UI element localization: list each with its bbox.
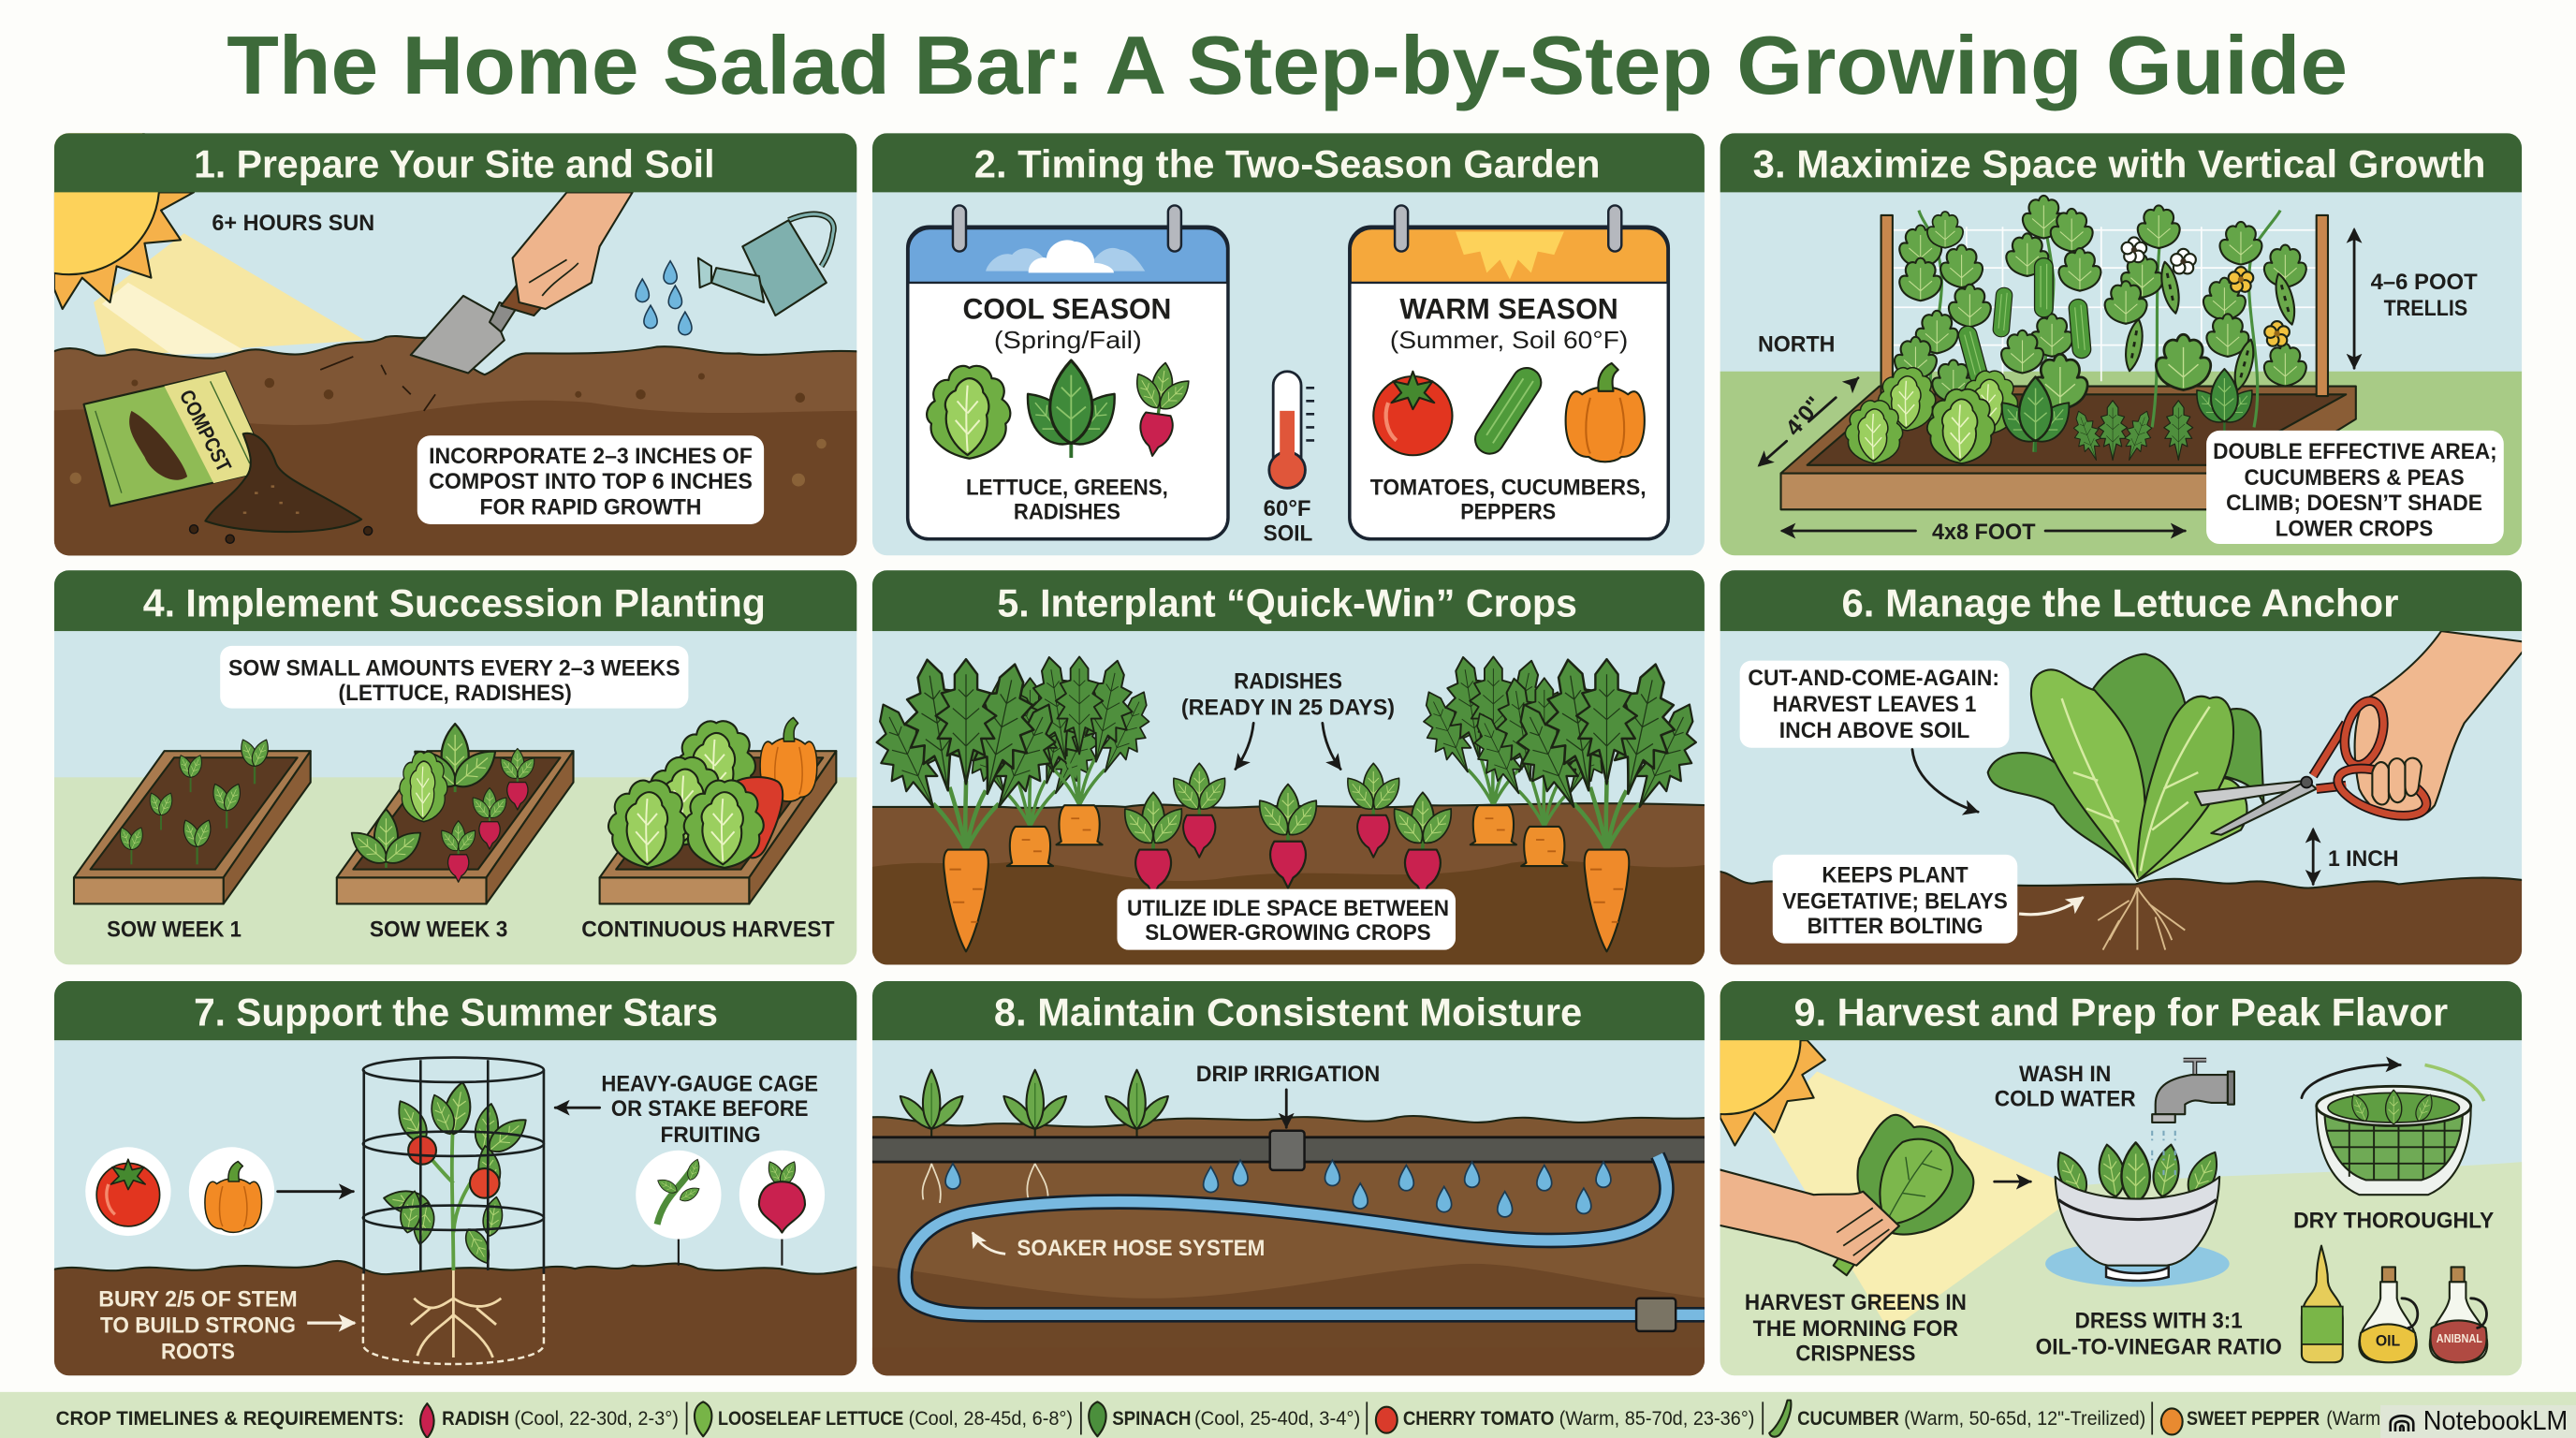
water drops xyxy=(636,261,692,335)
header 3 xyxy=(1720,133,2524,192)
arrow: to hose xyxy=(973,1233,1005,1254)
callout: compost: COMPOST INTO TOP 6 INCHES xyxy=(429,470,753,494)
header 3: 3. Maximize Space with Vertical Growth xyxy=(1753,142,2485,186)
notebooklm wordmark: NotebookLM xyxy=(2423,1406,2568,1436)
spinach details: (Cool, 25-40d, 3-4°) xyxy=(1194,1408,1360,1430)
separator xyxy=(1762,1401,1764,1434)
header 7 xyxy=(54,981,857,1040)
oil bottle xyxy=(2302,1246,2343,1362)
callout: double effective area: DOUBLE EFFECTIVE AREA; xyxy=(2213,440,2497,464)
bed: continuous harvest xyxy=(600,718,836,903)
callout: compost: FOR RAPID GROWTH xyxy=(479,495,701,520)
label: wash xyxy=(1995,1063,2136,1111)
salad spinner xyxy=(2302,1064,2484,1195)
callout: keeps plant vegetative: BITTER BOLTING xyxy=(1808,915,1983,939)
label: drip irrigation: DRIP IRRIGATION xyxy=(1196,1063,1380,1087)
label: continuous harvest: CONTINUOUS HARVEST xyxy=(581,918,835,943)
callout: keeps plant vegetative: KEEPS PLANT xyxy=(1822,864,1969,888)
icon: watering can xyxy=(698,214,834,315)
puddle xyxy=(2045,1240,2230,1287)
label: radishes ready xyxy=(1181,670,1395,721)
notebooklm badge xyxy=(2380,1405,2576,1438)
soil xyxy=(50,1261,862,1381)
label: dressing ratio: OIL-TO-VINEGAR RATIO xyxy=(2036,1335,2282,1359)
callout: cut and come again: CUT-AND-COME-AGAIN: xyxy=(1748,667,1999,691)
footer heading: CROP TIMELINES & REQUIREMENTS: xyxy=(56,1408,404,1430)
label: north: NORTH xyxy=(1758,333,1835,358)
lettuce details: (Cool, 28-45d, 6-8°) xyxy=(909,1408,1073,1430)
sunlight beam xyxy=(1766,1072,2083,1331)
panel: 3 vertical growth xyxy=(1720,133,2524,555)
label: bury stem: TO BUILD STRONG xyxy=(100,1314,296,1339)
warm season subheading: (Summer, Soil 60°F) xyxy=(1390,328,1628,354)
icon: clouds xyxy=(986,240,1145,272)
soil xyxy=(868,1116,1708,1381)
roots xyxy=(2098,888,2185,950)
compost bag xyxy=(84,372,270,506)
label: 60F soil xyxy=(1264,500,1312,541)
dashed root zone xyxy=(363,1273,544,1364)
compost pile xyxy=(190,433,373,543)
soil xyxy=(1715,871,2530,970)
callout: cut and come again: HARVEST LEAVES 1 xyxy=(1773,693,1976,717)
icon: spinach xyxy=(1089,1401,1106,1436)
icon: radish xyxy=(420,1403,434,1438)
icon: cucumber xyxy=(1473,367,1543,455)
roots xyxy=(411,1270,501,1357)
callout: cut and come again xyxy=(1740,661,2009,748)
header 5 xyxy=(872,570,1705,631)
callout: sow small amounts xyxy=(220,646,688,709)
vines xyxy=(1919,211,2280,452)
label: sow week 1: SOW WEEK 1 xyxy=(107,918,242,943)
label: harvest greens xyxy=(1745,1291,1967,1366)
calendar: cool season xyxy=(908,205,1228,539)
icon: pepper in circle xyxy=(189,1147,274,1236)
icon: pepper xyxy=(2161,1408,2183,1434)
arrow: crops to cage xyxy=(278,1191,353,1193)
hand and scissors xyxy=(2195,631,2530,835)
lettuce entry: LOOSELEAF LETTUCE xyxy=(718,1408,903,1430)
tomato details: (Warm, 85-70d, 23-36°) xyxy=(1559,1408,1754,1430)
arrow: to drip coupler xyxy=(1285,1090,1287,1127)
label: trellis height: TRELLIS xyxy=(2384,297,2467,321)
label: bed length: 4x8 FOOT xyxy=(1932,521,2036,545)
pepper details: (Warm xyxy=(2326,1408,2380,1430)
oil cruet: OIL xyxy=(2376,1332,2400,1350)
label: bed depth: 4'0" xyxy=(1781,392,1827,441)
panel: 6 lettuce anchor xyxy=(1715,570,2530,970)
label: dry thoroughly: DRY THOROUGHLY xyxy=(2293,1209,2494,1233)
soil xyxy=(50,335,862,559)
water spray xyxy=(2152,1131,2175,1177)
header 4 xyxy=(54,570,857,631)
seedlings xyxy=(900,1070,1168,1137)
header 6 xyxy=(1720,570,2524,631)
arrow: to bowl xyxy=(1995,1181,2030,1182)
trellis posts xyxy=(1881,215,2328,396)
warm season crops xyxy=(1370,479,1646,519)
thermometer xyxy=(1269,372,1314,488)
header 1 xyxy=(54,133,857,192)
header 6: 6. Manage the Lettuce Anchor xyxy=(1841,580,2398,624)
roots xyxy=(923,1164,1048,1203)
label: one inch: 1 INCH xyxy=(2328,847,2398,872)
warm season crops: TOMATOES, CUCUMBERS, xyxy=(1370,476,1647,500)
cool season heading: COOL SEASON xyxy=(962,292,1171,326)
icon: tomato xyxy=(1376,1407,1398,1433)
label: sun hours: 6+ HOURS SUN xyxy=(212,212,374,236)
icon: lettuce xyxy=(695,1401,711,1436)
cool season crops xyxy=(968,479,1166,519)
oil cruet xyxy=(2359,1267,2418,1362)
icon: trowel and hand xyxy=(411,192,633,373)
icon: tomato in circle xyxy=(85,1147,171,1236)
label: heavy gauge cage: FRUITING xyxy=(661,1123,761,1148)
callout: double effective area: CLIMB; DOESN’T SHADE xyxy=(2226,492,2482,516)
label: bury stem: BURY 2/5 OF STEM xyxy=(98,1288,298,1313)
panel: 2 two-season garden xyxy=(872,133,1705,555)
climbing leaves xyxy=(1895,196,2306,410)
separator xyxy=(1366,1401,1368,1434)
callout: sow small amounts: (LETTUCE, RADISHES) xyxy=(339,682,572,706)
header 1: 1. Prepare Your Site and Soil xyxy=(194,142,714,186)
icon: lettuce xyxy=(927,366,1010,459)
header 7: 7. Support the Summer Stars xyxy=(194,990,718,1034)
tomato entry: CHERRY TOMATO xyxy=(1403,1408,1554,1430)
soil xyxy=(868,803,1708,970)
callout: sow small amounts: SOW SMALL AMOUNTS EVERY 2–3 WEEKS xyxy=(228,656,681,681)
callout: utilize idle space: UTILIZE IDLE SPACE BETWEEN xyxy=(1127,897,1449,921)
pepper entry: SWEET PEPPER xyxy=(2187,1408,2320,1430)
icon: radish in circle xyxy=(739,1151,825,1266)
arrow: bed depth xyxy=(1760,378,1858,465)
callout: keeps plant vegetative: VEGETATIVE; BELAYS xyxy=(1782,890,2008,915)
radish details: (Cool, 22-30d, 2-3°) xyxy=(514,1408,679,1430)
icon: cucumber xyxy=(1769,1401,1791,1437)
cucumbers and pea pods xyxy=(1956,258,2299,392)
spinach entry: SPINACH xyxy=(1112,1408,1191,1430)
arrows: to radishes xyxy=(1236,723,1340,770)
warm season crops: PEPPERS xyxy=(1460,501,1556,525)
panel: 9 harvest and prep xyxy=(1649,963,2524,1377)
water drops xyxy=(945,1160,1611,1217)
panel: 5 interplanting xyxy=(858,570,1714,970)
trellis wire grid xyxy=(1886,227,2321,381)
footer strip: crop timelines xyxy=(0,1392,2576,1438)
header 9: 9. Harvest and Prep for Peak Flavor xyxy=(1794,990,2448,1034)
cool season crops: LETTUCE, GREENS, xyxy=(966,476,1168,500)
vinegar cruet: ANIBNAL xyxy=(2437,1331,2482,1345)
callout: keeps plant vegetative xyxy=(1773,855,2017,944)
label: trellis height xyxy=(2371,271,2478,321)
callout: compost: INCORPORATE 2–3 INCHES OF xyxy=(429,445,753,469)
label: heavy gauge cage: OR STAKE BEFORE xyxy=(611,1097,809,1122)
icon: sun xyxy=(1456,232,1564,279)
icon: sun xyxy=(54,133,195,311)
label: sow week 3: SOW WEEK 3 xyxy=(370,918,507,943)
cucumber entry: CUCUMBER xyxy=(1797,1408,1899,1430)
cool season subheading: (Spring/Fail) xyxy=(994,328,1142,354)
bowl of greens xyxy=(2049,1142,2225,1281)
icon: cucumber seedling in circle xyxy=(636,1151,721,1266)
soaker hose xyxy=(905,1155,1708,1314)
arrow: trellis height xyxy=(2353,230,2355,368)
panel: 1 prepare site and soil xyxy=(54,133,857,556)
label: trellis height: 4–6 POOT xyxy=(2371,271,2478,295)
header 9 xyxy=(1720,981,2524,1040)
icon: notebooklm logo xyxy=(2391,1416,2413,1431)
label: radishes ready: (READY IN 25 DAYS) xyxy=(1181,697,1395,721)
label: 60F soil: 60°F xyxy=(1264,497,1311,521)
label: soaker hose: SOAKER HOSE SYSTEM xyxy=(1017,1237,1265,1261)
arrow: to roots xyxy=(2019,897,2083,915)
lower crops xyxy=(1845,368,2260,464)
radishes xyxy=(1117,763,1459,896)
warm season heading: WARM SEASON xyxy=(1399,292,1618,326)
tomato plant xyxy=(382,1080,533,1270)
greens bunch in hand xyxy=(1715,1115,1973,1275)
sunlight beams xyxy=(94,233,365,357)
lettuce plant xyxy=(1988,654,2264,881)
label: dressing ratio xyxy=(2036,1309,2282,1359)
panel: 4 succession planting xyxy=(54,570,857,964)
label: dressing ratio: DRESS WITH 3:1 xyxy=(2075,1309,2243,1333)
separator xyxy=(2151,1401,2153,1434)
callout: double effective area: CUCUMBERS & PEAS xyxy=(2244,466,2465,491)
drip pipe xyxy=(868,1131,1708,1170)
tomato cage xyxy=(363,1058,544,1273)
label: radishes ready: RADISHES xyxy=(1234,670,1342,695)
callout: compost xyxy=(417,435,764,524)
carrots xyxy=(858,653,1714,951)
faucet xyxy=(2152,1060,2234,1123)
callout: utilize idle space xyxy=(1117,889,1456,950)
callout: utilize idle space: SLOWER-GROWING CROPS xyxy=(1145,921,1431,946)
arrow: to lettuce xyxy=(1912,749,1978,812)
callout: double effective area: LOWER CROPS xyxy=(2276,517,2433,541)
label: bury stem: ROOTS xyxy=(161,1341,235,1365)
separator xyxy=(686,1401,688,1434)
icon: sun xyxy=(1649,963,1825,1146)
title: The Home Salad Bar: A Step-by-Step Growing Guide xyxy=(227,20,2348,111)
header 5: 5. Interplant “Quick-Win” Crops xyxy=(997,580,1577,624)
panel: 7 summer stars xyxy=(50,981,862,1381)
panel: 8 consistent moisture xyxy=(868,981,1708,1381)
arrow: one inch xyxy=(2312,829,2314,884)
arrow: to cage xyxy=(555,1107,600,1108)
calendar: warm season xyxy=(1350,205,1668,539)
raised bed xyxy=(1781,387,2356,509)
bag text: COMPCST xyxy=(175,386,236,476)
header 4: 4. Implement Succession Planting xyxy=(143,580,766,624)
hose coupler xyxy=(1636,1299,1676,1331)
vinegar cruet xyxy=(2430,1267,2487,1362)
cucumber details: (Warm, 50-65d, 12"-Treilized) xyxy=(1904,1408,2145,1430)
cool season crops: RADISHES xyxy=(1014,501,1120,525)
header 2 xyxy=(872,133,1705,192)
label: harvest greens: HARVEST GREENS IN xyxy=(1745,1291,1967,1315)
callout: cut and come again: INCH ABOVE SOIL xyxy=(1779,719,1969,743)
arrows: bed length xyxy=(1782,530,2185,532)
header 2: 2. Timing the Two-Season Garden xyxy=(974,142,1600,186)
bed: week 1 xyxy=(74,737,311,903)
icon: tomato xyxy=(1373,372,1453,455)
label: harvest greens: CRISPNESS xyxy=(1795,1342,1915,1366)
label: heavy gauge cage xyxy=(601,1073,818,1148)
label: wash: COLD WATER xyxy=(1995,1087,2136,1111)
radish entry: RADISH xyxy=(442,1408,509,1430)
flowers xyxy=(2122,237,2290,346)
label: harvest greens: THE MORNING FOR xyxy=(1753,1317,1958,1342)
icon: radish xyxy=(1136,361,1190,457)
callout: double effective area xyxy=(2206,431,2504,544)
bed: week 3 xyxy=(337,724,574,903)
label: heavy gauge cage: HEAVY-GAUGE CAGE xyxy=(601,1073,818,1097)
icon: pepper xyxy=(1566,363,1645,462)
label: 60F soil: SOIL xyxy=(1264,522,1312,547)
icon: spinach xyxy=(1026,359,1116,459)
header 8: 8. Maintain Consistent Moisture xyxy=(994,990,1582,1034)
label: bury stem xyxy=(98,1288,298,1365)
separator xyxy=(1080,1401,1082,1434)
header 8 xyxy=(872,981,1705,1040)
arrow: to root zone xyxy=(307,1322,355,1324)
label: wash: WASH IN xyxy=(2019,1063,2111,1087)
